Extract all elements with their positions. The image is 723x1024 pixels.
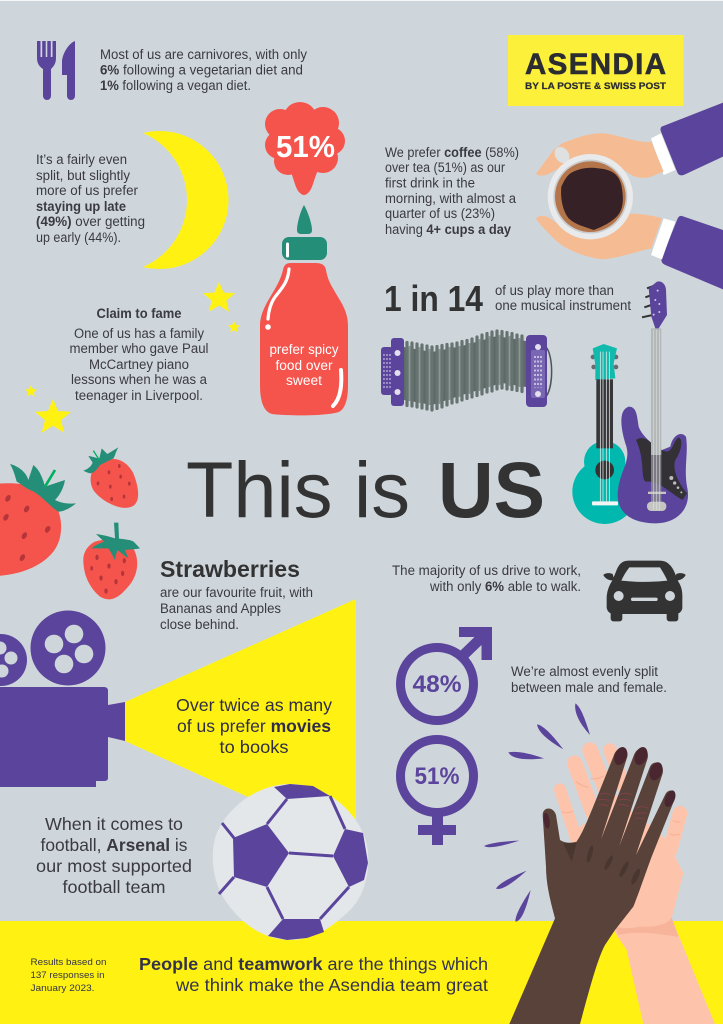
text: claim to fame: member who gave Paul bbox=[70, 341, 208, 356]
text: strawberries: are our favourite fruit, with bbox=[160, 585, 313, 600]
icon: hot sauce bottle: prefer spicy bbox=[270, 342, 339, 357]
text: diet bbox=[100, 47, 307, 93]
text: football: When it comes to bbox=[45, 814, 183, 834]
title: This is bbox=[186, 445, 410, 534]
text: coffee: over tea (51%) as our bbox=[385, 160, 505, 175]
icon: hot sauce bottle bbox=[260, 205, 348, 415]
text: teamwork: People and teamwork are the things which bbox=[139, 954, 488, 974]
text: claim to fame: One of us has a family bbox=[74, 326, 204, 341]
text: football bbox=[36, 814, 192, 897]
text: teamwork bbox=[139, 954, 488, 995]
text: night owls bbox=[36, 152, 145, 245]
text: musical instrument bbox=[495, 283, 631, 313]
icon: car bbox=[603, 561, 686, 621]
text: claim to fame: McCartney piano bbox=[89, 357, 189, 372]
illustration: ukulele bbox=[572, 344, 637, 524]
text: movies: to books bbox=[220, 737, 289, 757]
text: gender split: between male and female. bbox=[511, 680, 667, 695]
text: coffee: morning, with almost a bbox=[385, 191, 516, 206]
logo: Asendia: BY LA POSTE & SWISS POST bbox=[525, 81, 666, 92]
icon: male symbol 48%: 48% bbox=[412, 671, 462, 698]
text: musical instrument: one musical instrument bbox=[495, 298, 631, 313]
text: results note: 137 responses in bbox=[30, 970, 104, 981]
illustration: hands holding coffee bbox=[536, 103, 723, 289]
icon: hot sauce bottle: food over bbox=[276, 358, 333, 373]
text: movies: Over twice as many bbox=[176, 695, 332, 715]
text: results note: Results based on bbox=[30, 957, 106, 968]
text: teamwork: we think make the Asendia team great bbox=[175, 975, 488, 995]
text: movies: of us prefer movies bbox=[177, 716, 331, 736]
icon: fork and knife bbox=[37, 41, 75, 100]
text: strawberries bbox=[160, 556, 313, 632]
yellow footer band bbox=[0, 921, 723, 1024]
logo: Asendia bbox=[508, 35, 684, 106]
text: claim to fame bbox=[70, 306, 208, 403]
illustration: bass guitar bbox=[618, 281, 688, 523]
illustration: strawberries bbox=[0, 447, 140, 599]
text: claim to fame: lessons when he was a bbox=[71, 372, 207, 387]
text: strawberries: close behind. bbox=[160, 617, 239, 632]
text: diet: 1% following a vegan diet. bbox=[100, 78, 251, 93]
text: results note bbox=[30, 957, 106, 994]
icon: female symbol 51%: 51% bbox=[414, 763, 460, 790]
text: night owls: staying up late bbox=[36, 199, 126, 214]
text: coffee: having 4+ cups a day bbox=[385, 222, 511, 237]
illustration: accordion bbox=[381, 331, 552, 410]
icon: crescent moon bbox=[143, 131, 228, 269]
text: coffee bbox=[385, 145, 519, 237]
icon: hot sauce bottle: sweet bbox=[286, 373, 322, 388]
text: coffee: first drink in the bbox=[385, 176, 475, 190]
text: night owls: It’s a fairly even bbox=[36, 152, 127, 167]
projector beam bbox=[125, 599, 356, 846]
text: strawberries: Bananas and Apples bbox=[160, 601, 281, 616]
title bbox=[186, 445, 545, 534]
text: night owls: split, but slightly bbox=[36, 168, 130, 183]
text: football: football team bbox=[62, 877, 166, 897]
logo: Asendia: ASENDIA bbox=[525, 48, 666, 81]
text: gender split bbox=[511, 664, 667, 695]
text: night owls: (49%) over getting bbox=[36, 214, 145, 229]
illustration: football bbox=[213, 784, 368, 940]
text: coffee: quarter of us (23%) bbox=[385, 206, 495, 221]
illustration: film projector bbox=[0, 610, 125, 787]
text: night owls: up early (44%). bbox=[36, 230, 121, 245]
icon: male symbol 48% bbox=[400, 627, 492, 720]
text: musical instrument: of us play more than bbox=[495, 283, 614, 298]
text: football: football, Arsenal is bbox=[40, 835, 188, 855]
text: diet: Most of us are carnivores, with only bbox=[100, 47, 307, 62]
text: 1 in 14: 1 in 14 bbox=[384, 278, 483, 319]
icon: female symbol 51% bbox=[400, 740, 474, 845]
text: drive to work bbox=[392, 563, 581, 594]
illustration: high five bbox=[484, 703, 715, 1024]
text: results note: January 2023. bbox=[30, 983, 94, 994]
text: strawberries: Strawberries bbox=[160, 556, 300, 582]
text: coffee: We prefer coffee (58%) bbox=[385, 145, 519, 160]
icon: stars bbox=[25, 282, 240, 433]
text: drive to work: The majority of us drive to work, bbox=[392, 563, 581, 578]
text: movies bbox=[176, 695, 332, 757]
text: diet: 6% following a vegetarian diet and bbox=[100, 62, 303, 78]
text: gender split: We’re almost evenly split bbox=[511, 664, 658, 679]
text: night owls: more of us prefer bbox=[36, 183, 138, 198]
text: football: our most supported bbox=[36, 856, 192, 876]
icon: speech cloud 51% bbox=[265, 102, 345, 195]
text: claim to fame: teenager in Liverpool. bbox=[75, 388, 203, 403]
text: drive to work: with only 6% able to walk. bbox=[429, 579, 581, 594]
title: US bbox=[438, 445, 545, 534]
text: claim to fame: Claim to fame bbox=[96, 306, 182, 321]
icon: speech cloud 51%: 51% bbox=[276, 129, 335, 164]
